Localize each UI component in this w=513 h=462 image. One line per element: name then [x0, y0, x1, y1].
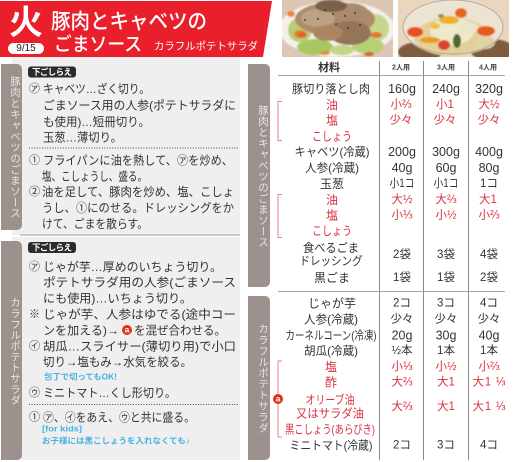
- salad ingredient rows: [285, 296, 506, 452]
- salad ingredient rows: 少々: [434, 312, 458, 326]
- salad ingredient rows: 大1: [437, 399, 455, 413]
- pork ingredient rows: 40g: [392, 161, 412, 175]
- photo: pork and cabbage: [279, 0, 395, 57]
- salad ingredient rows: 塩: [325, 359, 337, 374]
- salad ingredient rows: 胡瓜(冷蔵): [304, 344, 358, 358]
- salad ingredient rows: ½本: [391, 343, 413, 357]
- salad ingredient rows: 又はサラダ油: [296, 406, 364, 420]
- salad ingredient rows: ミニトマト(冷蔵): [290, 438, 372, 452]
- prep text: ※: [29, 308, 40, 320]
- pork ingredient rows: 1コ: [480, 178, 498, 190]
- table header: 4人用: [479, 64, 497, 72]
- prep text: [29, 259, 236, 369]
- tomato prep: ミニトマト…くし形切り。: [43, 386, 176, 400]
- ingredients table: [273, 60, 506, 460]
- cooking steps: うし、①にのせる。ドレッシングをか: [42, 201, 234, 215]
- pork ingredient rows: 小½: [435, 208, 457, 222]
- side tab: pork recipe: [1, 64, 22, 230]
- pork ingredient rows: こしょう: [312, 130, 352, 144]
- subtitle: カラフルポテトサラダ: [154, 40, 258, 52]
- salad ingredient rows: 40g: [479, 328, 499, 342]
- table header: [318, 60, 497, 74]
- pork ingredient rows: 大½: [478, 97, 500, 111]
- side tab: pork ingredients: 豚肉とキャベツのごまソース: [257, 105, 269, 247]
- salad ingredient rows: 大⅔: [391, 374, 413, 388]
- salad ingredient rows: 2コ: [393, 298, 411, 310]
- pork ingredient rows: 240g: [432, 82, 460, 96]
- pork ingredient rows: 2袋: [480, 270, 498, 284]
- pork ingredient rows: 小1: [436, 98, 454, 111]
- salad ingredient rows: 2コ: [393, 440, 411, 452]
- prep text: ㋑: [29, 340, 40, 352]
- pork ingredient rows: 200g: [388, 145, 416, 159]
- pork ingredient rows: 小⅔: [478, 208, 500, 222]
- side tab: salad ingredients: [248, 296, 270, 460]
- pork ingredient rows: 1袋: [393, 270, 411, 284]
- prep text: 胡瓜…スライサー(薄切り用)で小口: [43, 338, 236, 354]
- table header: 材料: [318, 60, 340, 74]
- prep text: 玉葱…薄切り。: [43, 130, 122, 144]
- final step: ①: [29, 410, 40, 424]
- pork ingredient rows: こしょう: [312, 224, 352, 238]
- prep text: キャベツ…ざく切り。: [43, 81, 150, 96]
- salad ingredient rows: 黒こしょう(あらびき): [285, 422, 375, 436]
- salad ingredient rows: じゃが芋: [308, 296, 356, 310]
- pork ingredient rows: 2袋: [393, 247, 411, 261]
- side tab: salad recipe: カラフルポテトサラダ: [9, 297, 21, 405]
- date pill: 9/15: [16, 43, 36, 54]
- prep text: ㋐: [29, 260, 40, 273]
- salad ingredient rows: 1本: [480, 343, 498, 357]
- pork ingredient rows: 60g: [436, 161, 456, 175]
- prep text: にも使用)…いちょう切り。: [43, 290, 192, 306]
- main title line 1: 豚肉とキャベツの: [51, 10, 207, 34]
- panel: pork recipe steps: [1, 57, 240, 235]
- pork ingredient rows: 400g: [475, 145, 503, 159]
- salad ingredient rows: 大1: [437, 374, 455, 388]
- salad ingredient rows: 人参(冷蔵): [304, 312, 358, 326]
- prep text: ポテトサラダ用の人参(ごまソース: [43, 274, 236, 290]
- label: prep: 下ごしらえ: [32, 242, 72, 252]
- date pill: [8, 43, 44, 54]
- label: prep: 下ごしらえ: [32, 67, 72, 77]
- prep text: ㋐: [29, 82, 40, 95]
- salad ingredient rows: 少々: [390, 312, 414, 326]
- salad ingredient rows: 小⅔: [478, 360, 500, 373]
- salad ingredient rows: 1本: [437, 343, 455, 357]
- pork ingredient rows: 80g: [479, 161, 499, 175]
- salad ingredient rows: 大1 ⅓: [472, 399, 506, 413]
- for kids note: [42, 424, 190, 446]
- prep text: じゃが芋…厚めのいちょう切り。: [43, 259, 222, 274]
- salad ingredient rows: 大⅔: [391, 399, 413, 413]
- pork ingredient rows: 大⅔: [435, 192, 457, 206]
- salad ingredient rows: カーネルコーン(冷凍): [286, 328, 377, 342]
- pork ingredient rows: 4袋: [480, 247, 498, 261]
- pork ingredient rows: 塩: [326, 208, 338, 222]
- cooking steps: ②: [29, 185, 40, 198]
- cooking steps: ①: [29, 154, 40, 166]
- weekday character: 火: [9, 4, 43, 42]
- pork ingredient rows: 油: [326, 193, 338, 207]
- for kids note: お子様には黒こしょうを入れなくても♪: [42, 436, 190, 446]
- panel: salad recipe steps: [1, 237, 240, 460]
- salad ingredient rows: 4コ: [480, 298, 498, 310]
- prep text: じゃが芋、人参はゆでる(途中コー: [43, 306, 236, 322]
- salad ingredient rows: 30g: [436, 328, 456, 342]
- pork ingredient rows: キャベツ(冷蔵): [294, 145, 370, 159]
- pork ingredient rows: [292, 82, 503, 285]
- pork ingredient rows: 1袋: [437, 270, 455, 284]
- salad ingredient rows: 20g: [392, 328, 412, 342]
- seasoning brackets: [278, 102, 282, 437]
- pork ingredient rows: 大1: [479, 192, 497, 206]
- marker a: [273, 394, 283, 404]
- table header: 3人用: [437, 64, 455, 72]
- salad ingredient rows: 3コ: [437, 298, 455, 310]
- pork ingredient rows: 3袋: [437, 247, 455, 261]
- side tab: salad ingredients: カラフルポテトサラダ: [257, 323, 269, 433]
- pork ingredient rows: 少々: [434, 112, 456, 126]
- prep text: 切り→塩もみ→水気を絞る。: [43, 354, 192, 369]
- cooking steps: [29, 154, 234, 231]
- pork ingredient rows: 黒ごま: [314, 270, 350, 285]
- pork ingredient rows: 少々: [390, 112, 412, 126]
- prep text: a: [125, 324, 130, 334]
- for kids note: [for kids]: [42, 424, 82, 434]
- salad ingredient rows: 少々: [478, 312, 500, 326]
- salad ingredient rows: 大1 ⅓: [472, 374, 506, 388]
- pork ingredient rows: 320g: [475, 82, 503, 96]
- tip note: 包丁で切ってもOK!: [44, 372, 117, 382]
- prep text: ンを加える)→: [43, 324, 119, 338]
- pork ingredient rows: 食べるごま: [303, 240, 359, 255]
- pork ingredient rows: 少々: [478, 112, 500, 126]
- salad ingredient rows: 小½: [435, 360, 457, 373]
- pork ingredient rows: 小⅔: [390, 98, 412, 111]
- photo: colorful potato salad: [398, 0, 509, 57]
- pork ingredient rows: 油: [326, 98, 338, 112]
- prep text: を混ぜ合わせる。: [134, 322, 226, 338]
- pork ingredient rows: 人参(冷蔵): [305, 161, 359, 175]
- pork ingredient rows: 小⅓: [391, 208, 413, 222]
- salad ingredient rows: オリーブ油: [306, 392, 354, 407]
- pork ingredient rows: 小1コ: [434, 177, 458, 190]
- final step: ㋐、㋑をあえ、㋒と共に盛る。: [43, 410, 195, 424]
- pork ingredient rows: 玉葱: [320, 177, 344, 191]
- cooking steps: 油を足して、豚肉を炒め、塩、こしょ: [42, 184, 234, 199]
- cooking steps: けて、ごまを散らす。: [42, 216, 148, 231]
- pork ingredient rows: 豚切り落とし肉: [292, 82, 370, 96]
- salad ingredient rows: 3コ: [437, 440, 455, 452]
- main title line 2: ごまソース: [54, 34, 142, 56]
- pork ingredient rows: ドレッシング: [300, 254, 362, 268]
- header banner: [0, 1, 272, 57]
- side tab: salad recipe: [1, 241, 22, 460]
- marker a: a: [276, 394, 281, 404]
- tomato prep: ㋒: [29, 386, 40, 399]
- pork ingredient rows: 小1コ: [390, 177, 414, 190]
- pork ingredient rows: 塩: [326, 112, 338, 128]
- table header: 2人用: [392, 64, 410, 72]
- pork ingredient rows: 300g: [432, 145, 460, 159]
- side tab: pork recipe: 豚肉とキャベツのごまソース: [9, 76, 21, 218]
- salad ingredient rows: 小⅓: [391, 360, 413, 373]
- pork ingredient rows: 大½: [391, 192, 413, 206]
- salad ingredient rows: 4コ: [480, 440, 498, 452]
- cooking steps: 塩、こしょうし、盛る。: [42, 168, 147, 184]
- prep text: ごまソース用の人参(ポテトサラダに: [43, 98, 236, 112]
- salad ingredient rows: 酢: [325, 374, 337, 390]
- prep text: [29, 81, 236, 144]
- side tab: pork ingredients: [248, 64, 270, 287]
- prep text: も使用)…短冊切り。: [43, 114, 150, 129]
- cooking steps: フライパンに油を熱して、㋐を炒め、: [43, 154, 233, 168]
- pork ingredient rows: 160g: [388, 82, 416, 96]
